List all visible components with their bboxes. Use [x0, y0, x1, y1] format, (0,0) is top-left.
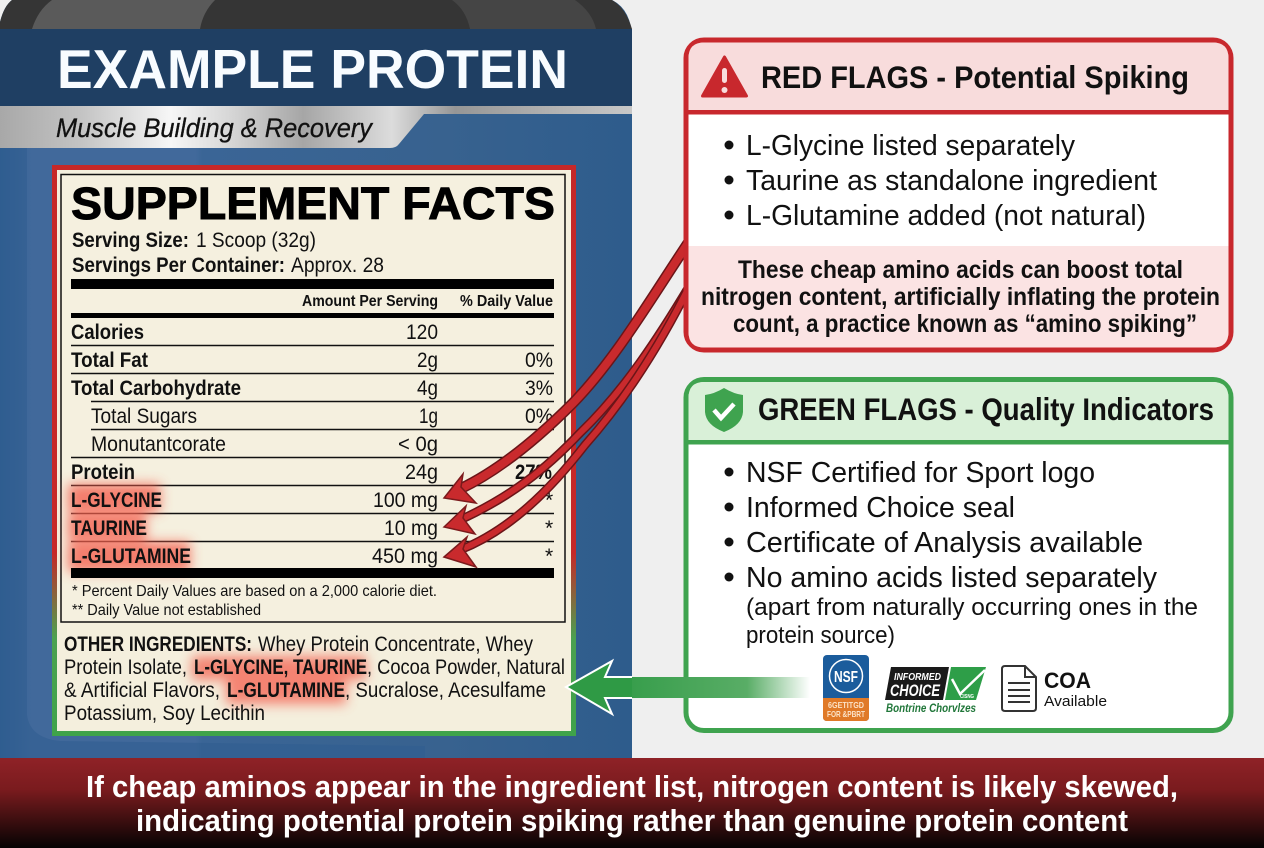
nutrition rows: 24g: [405, 461, 438, 484]
nutrition rows: TAURINE: [71, 517, 147, 540]
other ingredients: & Artificial Flavors,: [64, 679, 220, 702]
column headers: [302, 293, 553, 310]
green flags list: No amino acids listed separately: [746, 562, 1157, 594]
nutrition rows: 2g: [417, 349, 438, 372]
green flags list: protein source): [746, 622, 895, 649]
NSF certified logo: FOR &PBRT: [827, 709, 866, 719]
supplement facts panel: [61, 174, 565, 622]
red panel header: [688, 42, 1229, 114]
red panel explanation: count, a practice known as “amino spiking”: [733, 310, 1197, 338]
NSF certified logo: [823, 655, 869, 721]
Informed Choice logo: [885, 667, 986, 715]
other ingredients: , Sucralose, Acesulfame: [345, 679, 546, 702]
arrow: green flags to ingredients: [566, 661, 810, 714]
nutrition rows: Protein: [71, 461, 135, 484]
footnotes: ** Daily Value not established: [72, 602, 261, 619]
nutrition rows: Total Fat: [71, 349, 148, 372]
tagline: Muscle Building & Recovery: [56, 113, 373, 143]
nutrition rows: Calories: [71, 321, 144, 344]
conclusion text: If cheap aminos appear in the ingredient list, nitrogen content is likely skewed,: [86, 769, 1178, 804]
icon: shield check: [705, 388, 743, 432]
product name: EXAMPLE PROTEIN: [57, 38, 568, 100]
facts title: SUPPLEMENT FACTS: [71, 178, 555, 229]
arrow: red flags to Taurine: [444, 285, 690, 534]
red panel explanation: nitrogen content, artificially inflating the protein: [701, 283, 1220, 311]
Informed Choice logo: CHOICE: [890, 681, 940, 700]
nutrition rows: [71, 321, 553, 568]
red panel explanation: [688, 246, 1228, 348]
serving information: Approx. 28: [291, 254, 384, 277]
green flags panel: [686, 380, 1231, 730]
nutrition rows: *: [545, 545, 553, 568]
nutrition rows: 120: [406, 321, 438, 344]
COA label: Available: [1044, 693, 1107, 710]
footnotes: [72, 583, 437, 619]
Informed Choice logo: INFORMED: [894, 672, 941, 683]
serving information: 1 Scoop (32g): [196, 229, 316, 252]
conclusion text: [86, 769, 1178, 838]
other ingredients: Potassium, Soy Lecithin: [64, 702, 265, 725]
nutrition rows: 100 mg: [373, 489, 438, 512]
other ingredients: [64, 633, 565, 725]
conclusion text: indicating potential protein spiking rather than genuine protein content: [136, 803, 1128, 838]
bottle cap: [0, 0, 632, 29]
supplement label: [54, 168, 574, 734]
Informed Choice logo: CISNG: [960, 694, 974, 700]
nutrition rows: 0%: [525, 405, 553, 428]
green flags list: Informed Choice seal: [746, 492, 1015, 524]
green flags list: NSF Certified for Sport logo: [746, 457, 1095, 489]
nutrition rows: 1g: [419, 405, 438, 428]
red flags list: Taurine as standalone ingredient: [746, 165, 1157, 197]
red panel explanation: These cheap amino acids can boost total: [738, 256, 1183, 284]
nutrition rows: 10 mg: [384, 517, 438, 540]
arrow: red flags to L-Glycine: [444, 240, 690, 503]
red flags list: L-Glycine listed separately: [746, 130, 1075, 162]
COA label: [1044, 668, 1107, 710]
red flags list: L-Glutamine added (not natural): [746, 200, 1146, 232]
green flags list: [724, 457, 1198, 649]
NSF certified logo: 6GETITGD: [828, 700, 864, 710]
supplement bottle: [0, 0, 632, 758]
nutrition rows: 450 mg: [372, 545, 438, 568]
silver tagline band: [0, 106, 632, 148]
other ingredients: , Cocoa Powder, Natural: [367, 656, 565, 679]
COA label: COA: [1044, 668, 1091, 693]
other ingredients: Protein Isolate,: [64, 656, 187, 679]
icon: warning triangle: [702, 57, 746, 96]
serving information: Servings Per Container:: [72, 254, 285, 277]
arrow: red flags to L-Glutamine: [444, 285, 690, 567]
green flags list: Certificate of Analysis available: [746, 527, 1143, 559]
serving information: [72, 229, 384, 277]
nutrition rows: 3%: [525, 377, 553, 400]
nutrition rows: Total Sugars: [91, 405, 197, 428]
nutrition rows: < 0g: [398, 433, 438, 456]
nutrition rows: *: [545, 489, 553, 512]
column headers: Amount Per Serving: [302, 293, 438, 310]
nutrition rows: Total Carbohydrate: [71, 377, 241, 400]
red panel heading: RED FLAGS - Potential Spiking: [761, 59, 1189, 95]
green panel heading: GREEN FLAGS - Quality Indicators: [758, 391, 1214, 427]
nutrition rows: 27%: [515, 461, 552, 484]
serving information: Serving Size:: [72, 229, 189, 252]
conclusion banner: [0, 758, 1264, 848]
other ingredients: L-GLUTAMINE: [227, 679, 345, 702]
nutrition rows: L-GLYCINE: [71, 489, 162, 512]
other ingredients: Whey Protein Concentrate, Whey: [258, 633, 533, 656]
Informed Choice logo: Bontrine Chorvlzes: [886, 703, 976, 715]
red flags list: [724, 130, 1157, 232]
nutrition rows: Monutantcorate: [91, 433, 226, 456]
column headers: % Daily Value: [460, 293, 553, 310]
NSF certified logo: NSF: [834, 669, 858, 686]
nutrition rows: *: [545, 517, 553, 540]
other ingredients: L-GLYCINE, TAURINE: [194, 656, 367, 679]
nutrition rows: 0%: [525, 349, 553, 372]
nutrition rows: 4g: [417, 377, 438, 400]
icon: COA document: [1002, 666, 1036, 711]
other ingredients: OTHER INGREDIENTS:: [64, 633, 252, 656]
green flags list: (apart from naturally occurring ones in the: [746, 594, 1198, 621]
nutrition rows: L-GLUTAMINE: [71, 545, 191, 568]
highlight glow: cheap aminos: [68, 484, 190, 572]
red flags panel: [686, 40, 1231, 350]
green panel header: [688, 382, 1229, 444]
product name band: [0, 29, 632, 106]
footnotes: * Percent Daily Values are based on a 2,000 calorie diet.: [72, 583, 437, 600]
